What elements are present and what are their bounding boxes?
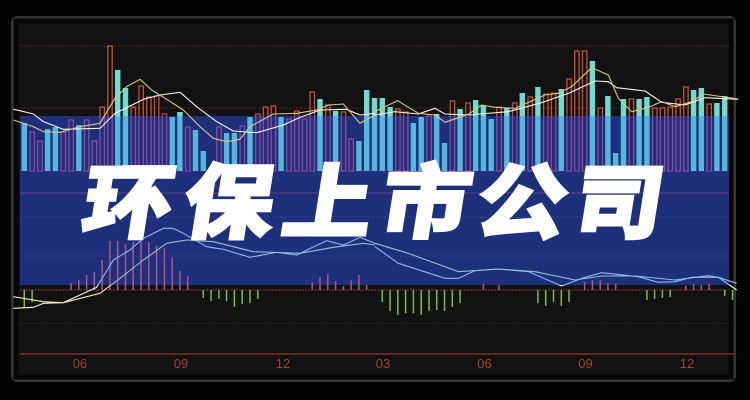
x axis labels: 06 bbox=[477, 356, 492, 371]
x axis labels: 06 bbox=[73, 356, 87, 371]
title bbox=[77, 158, 671, 248]
moving average: yellow line bbox=[13, 79, 375, 142]
MACD lines left bbox=[13, 228, 375, 308]
title: 上 bbox=[277, 158, 380, 248]
x axis labels: 12 bbox=[680, 356, 694, 371]
blue band bbox=[20, 116, 729, 285]
solid volume bars bbox=[22, 61, 727, 171]
x axis labels: 09 bbox=[174, 356, 188, 371]
title: 司 bbox=[568, 158, 671, 248]
x axis labels: 12 bbox=[276, 356, 290, 371]
hollow volume bars bbox=[30, 46, 711, 171]
moving average: white line right bbox=[375, 81, 738, 115]
title: 环 bbox=[77, 158, 180, 248]
moving average: white line bbox=[13, 92, 375, 133]
title: 公 bbox=[471, 158, 574, 248]
x axis labels: 09 bbox=[578, 356, 593, 371]
title: 市 bbox=[375, 158, 478, 248]
grid lines bbox=[20, 46, 735, 354]
x axis labels bbox=[73, 356, 694, 371]
title: 保 bbox=[178, 158, 281, 248]
x axis labels: 03 bbox=[376, 356, 390, 371]
MACD negative bars bbox=[24, 290, 733, 315]
MACD positive bars bbox=[71, 241, 709, 290]
MACD lines right bbox=[375, 243, 737, 290]
moving average: yellow line right bbox=[375, 68, 738, 122]
